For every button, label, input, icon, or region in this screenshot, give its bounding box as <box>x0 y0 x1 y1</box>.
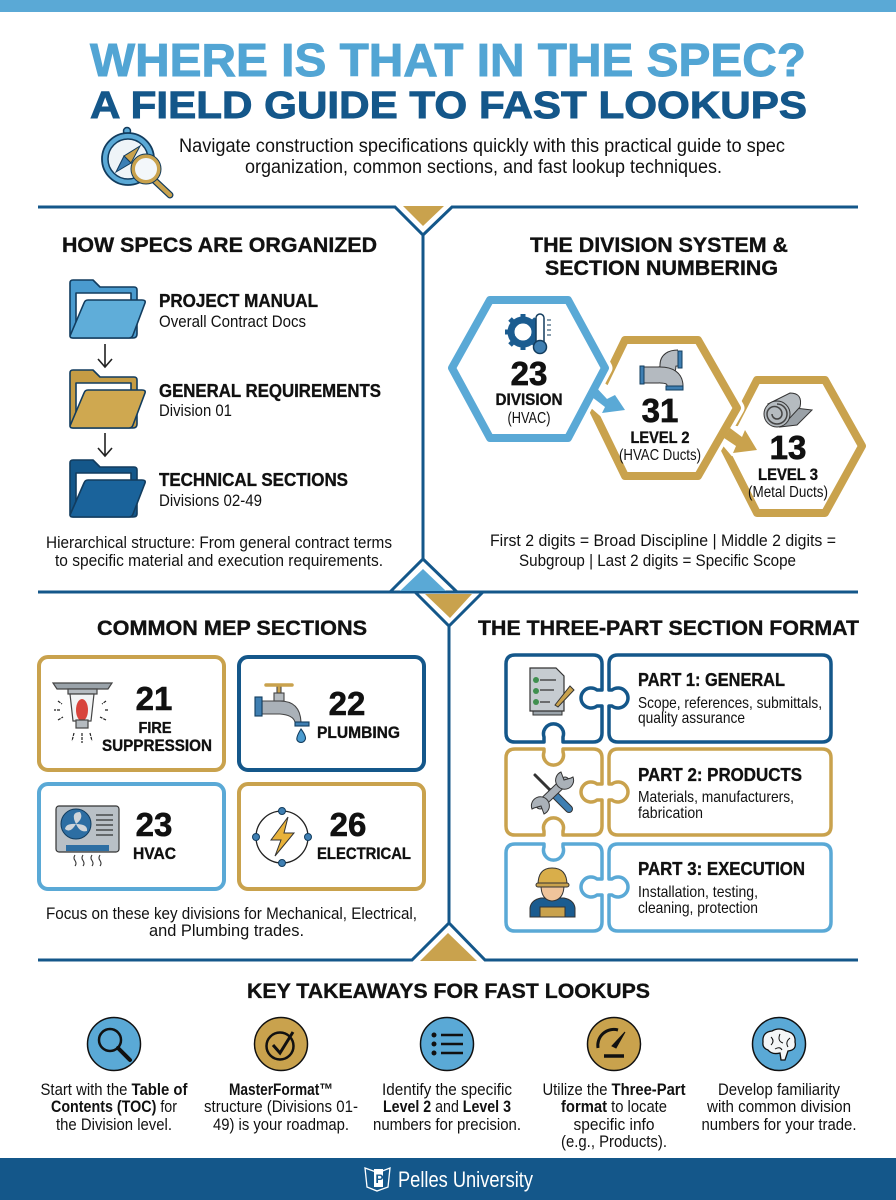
icon: gauge <box>588 1018 640 1070</box>
panel: part 3: PART 3: EXECUTION <box>638 858 805 879</box>
takeaway: familiarity: numbers for your trade. <box>702 1116 856 1134</box>
icon: lightning circuit <box>252 808 312 866</box>
icon: duct pipe <box>640 351 683 390</box>
takeaway: table of contents: the Division level. <box>56 1116 172 1134</box>
panel: part 1: Scope, references, submittals, <box>638 695 822 712</box>
arrow: division to level 2 <box>588 385 625 413</box>
icon: compass and magnifier <box>102 128 170 195</box>
icon: metal roll <box>764 393 812 427</box>
panel: plumbing card: PLUMBING <box>317 724 400 742</box>
caption: digits: Subgroup | Last 2 digits = Specific Scope <box>519 552 796 570</box>
hexagon: level 2 <box>592 340 737 476</box>
caption: hierarchy <box>46 533 392 570</box>
arrow: down <box>98 344 112 367</box>
arrow: down <box>98 433 112 456</box>
icon: worker <box>530 868 575 917</box>
project manual label: Overall Contract Docs <box>159 313 306 331</box>
icon: faucet <box>255 685 309 742</box>
panel: fire suppression card: SUPPRESSION <box>102 737 212 755</box>
notch triangle: top gold <box>403 206 444 226</box>
takeaway: masterformat <box>204 1018 358 1134</box>
top accent bar <box>0 0 896 12</box>
chart: numbering hexagons <box>452 300 862 513</box>
general requirements label <box>159 381 381 420</box>
hexagon: division: (HVAC) <box>508 410 550 427</box>
heading: how specs are organized: HOW SPECS ARE ORGANIZED <box>62 234 377 257</box>
technical sections label: TECHNICAL SECTIONS <box>159 470 348 490</box>
heading: division system: SECTION NUMBERING <box>545 257 778 280</box>
heading: common MEP sections: COMMON MEP SECTIONS <box>97 617 367 640</box>
hexagon: level 3 <box>723 380 862 513</box>
takeaway: familiarity <box>702 1018 856 1134</box>
technical sections label <box>159 470 348 510</box>
project manual label: PROJECT MANUAL <box>159 291 318 311</box>
takeaway: levels <box>373 1018 521 1134</box>
takeaway: familiarity: Develop familiarity <box>718 1081 841 1099</box>
panel: plumbing card: 22 <box>329 685 365 722</box>
title: WHERE IS THAT IN THE SPEC? <box>90 34 806 86</box>
takeaway: three-part format: Utilize the Three-Part <box>542 1081 686 1099</box>
caption: hierarchy: to specific material and execution requirements. <box>55 551 383 570</box>
icon: brain <box>752 1018 806 1070</box>
hexagon: level 2: 31 <box>642 392 678 429</box>
panel: part 1 <box>506 655 831 742</box>
layout dividers and notches <box>38 207 858 960</box>
caption: digits <box>490 532 836 570</box>
hexagon: division: DIVISION <box>496 390 562 409</box>
technical sections label: Divisions 02-49 <box>159 492 262 510</box>
panel: part 2 <box>506 749 831 835</box>
heading: three-part format: THE THREE-PART SECTION FORMAT <box>478 617 859 640</box>
icon: magnifier <box>88 1018 140 1070</box>
panel: electrical card: 26 <box>330 806 366 843</box>
panel: part 2: PART 2: PRODUCTS <box>638 764 802 785</box>
takeaway: three-part format: format to locate <box>561 1098 667 1116</box>
icon: gear and thermometer <box>505 314 551 354</box>
heading: division system: THE DIVISION SYSTEM & <box>530 234 788 257</box>
takeaway: three-part format <box>542 1018 686 1151</box>
project manual label <box>159 291 318 331</box>
panel: part 2: Materials, manufacturers, <box>638 789 794 806</box>
icon: checkmark circle <box>254 1018 308 1070</box>
heading: division system <box>530 234 788 280</box>
takeaway: levels: Level 2 and Level 3 <box>383 1098 511 1116</box>
panel: part 3 <box>506 844 831 931</box>
panel: HVAC card: HVAC <box>133 845 176 863</box>
takeaway: masterformat: MasterFormat™ <box>229 1081 333 1099</box>
intro text: Navigate construction specifications quickly with this practical guide to spec <box>179 136 785 157</box>
footer bar: Pelles University <box>398 1167 533 1192</box>
hexagon: level 3: 13 <box>770 429 806 466</box>
takeaway: levels: numbers for precision. <box>373 1116 521 1134</box>
icon: wrench and screwdriver <box>531 772 574 814</box>
icon: open book logo: P <box>376 1172 384 1186</box>
arrow: division to level 2 white halo <box>585 384 625 413</box>
panel: part 1: PART 1: GENERAL <box>638 669 785 690</box>
panel: part 3: Installation, testing, <box>638 884 758 901</box>
icon: open book logo <box>365 1168 390 1191</box>
caption: digits: First 2 digits = Broad Discipline | Middle 2 digits = <box>490 532 836 550</box>
panel: part 1: quality assurance <box>638 710 745 727</box>
title: A FIELD GUIDE TO FAST LOOKUPS <box>90 85 807 127</box>
arrow: level 2 to level 3 <box>724 428 757 453</box>
icon: gold folder <box>70 370 145 428</box>
icon: checklist and pencil <box>530 668 574 715</box>
intro text <box>179 136 785 178</box>
footer bar <box>0 1158 896 1200</box>
takeaway: three-part format: (e.g., Products). <box>561 1133 667 1151</box>
intro text: organization, common sections, and fast lookup techniques. <box>245 157 722 178</box>
icon: blue folder <box>70 280 145 338</box>
caption: hierarchy: Hierarchical structure: From general contract terms <box>46 533 392 552</box>
caption: MEP focus <box>46 904 417 940</box>
panel: part 2: fabrication <box>638 805 703 822</box>
takeaway: familiarity: with common division <box>706 1098 851 1116</box>
panel: fire suppression card: FIRE <box>138 720 172 737</box>
panel: electrical card <box>239 784 424 889</box>
hexagon: level 2: (HVAC Ducts) <box>619 447 701 464</box>
takeaway: table of contents: Start with the Table of <box>40 1081 188 1099</box>
hexagon: division <box>452 300 605 438</box>
caption: MEP focus: Focus on these key divisions for Mechanical, Electrical, <box>46 904 417 923</box>
icon: navy folder <box>70 460 145 517</box>
hexagon: level 3: LEVEL 3 <box>758 465 818 484</box>
notch triangle: middle blue <box>400 569 446 591</box>
panel: HVAC card: 23 <box>136 806 172 843</box>
title <box>90 34 807 127</box>
icon: air conditioner <box>56 806 119 866</box>
takeaway: three-part format: specific info <box>574 1116 654 1134</box>
general requirements label: GENERAL REQUIREMENTS <box>159 381 381 401</box>
heading: key takeaways: KEY TAKEAWAYS FOR FAST LOOKUPS <box>247 980 650 1003</box>
takeaway: levels: Identify the specific <box>382 1081 512 1099</box>
arrow: level 2 to level 3 white halo <box>722 428 757 453</box>
takeaway: table of contents: Contents (TOC) for <box>51 1098 177 1116</box>
panel: fire suppression card: 21 <box>136 680 172 717</box>
general requirements label: Division 01 <box>159 402 232 420</box>
takeaway: masterformat: structure (Divisions 01- <box>204 1098 358 1116</box>
hexagon: level 2: LEVEL 2 <box>630 428 690 447</box>
panel: fire suppression card <box>39 657 224 770</box>
panel: electrical card: ELECTRICAL <box>317 845 411 863</box>
icon: sprinkler <box>53 683 112 743</box>
caption: MEP focus: and Plumbing trades. <box>149 921 304 940</box>
panel: HVAC card <box>39 784 224 889</box>
panel: plumbing card <box>239 657 424 770</box>
panel: part 3: cleaning, protection <box>638 900 758 917</box>
panel: specs hierarchy <box>70 280 381 517</box>
notch triangle: bottom gold <box>420 933 477 961</box>
hexagon: division: 23 <box>511 355 547 392</box>
hexagon: level 3: (Metal Ducts) <box>748 484 828 501</box>
icon: list <box>420 1018 474 1070</box>
takeaway: masterformat: 49) is your roadmap. <box>213 1116 349 1134</box>
takeaway: table of contents <box>40 1018 188 1134</box>
notch triangle: middle gold <box>425 594 472 618</box>
